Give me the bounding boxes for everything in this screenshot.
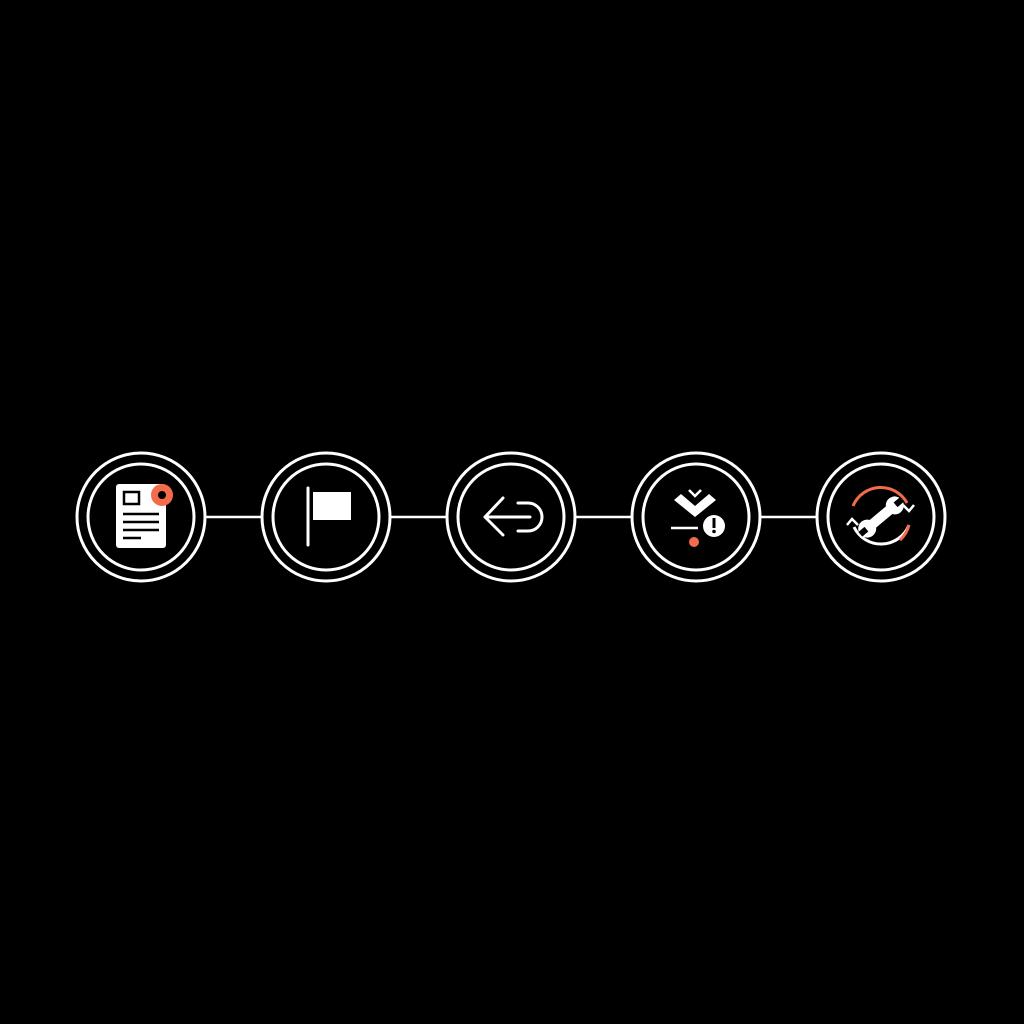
step 5: wrench maintenance icon [817,453,945,581]
step 3: return arrow icon [447,453,575,581]
step 1: document icon [77,453,205,581]
step 4: download warning icon [632,453,760,581]
step 2: flag icon [262,453,390,581]
